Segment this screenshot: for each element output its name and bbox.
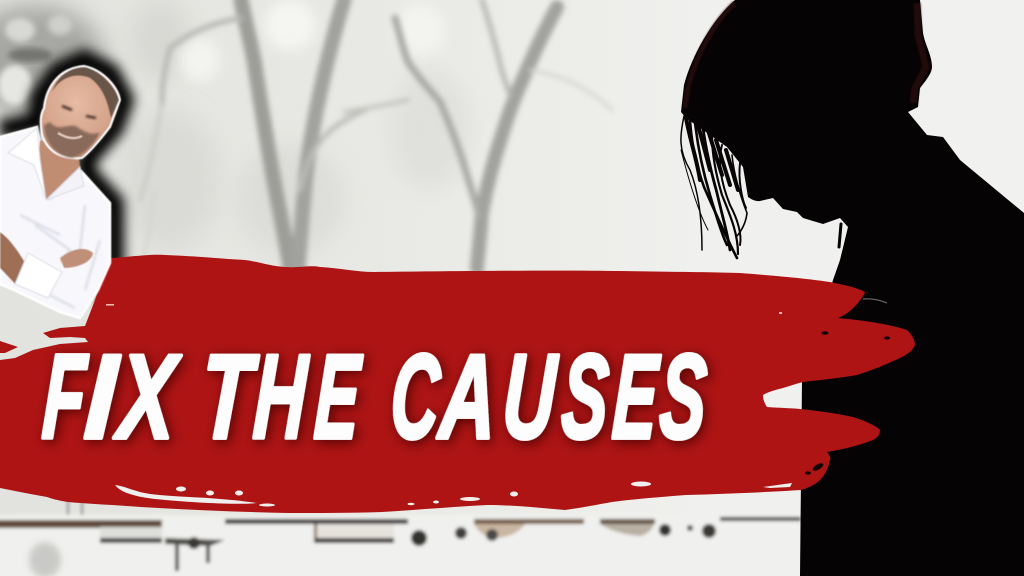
portrait dark halo (0, 60, 124, 300)
background: blurred bare trees (140, 0, 612, 270)
title: U (500, 330, 561, 464)
wet hair strands (681, 116, 747, 258)
man portrait figure (0, 66, 120, 318)
title: F (40, 330, 90, 464)
title: E (610, 330, 663, 464)
title: C (388, 330, 444, 464)
shirt cuff (15, 253, 62, 298)
dark splatter marks (805, 331, 890, 475)
hair (52, 67, 119, 118)
left-edge red diamond fleck (0, 341, 18, 353)
highlight on sleeve (863, 299, 887, 303)
head, neck and body (681, 0, 1024, 576)
silhouette of person with head bowed (681, 0, 1024, 576)
beard (44, 122, 100, 158)
beanie reddish tint (685, 3, 926, 108)
title: T (198, 330, 261, 464)
title (40, 330, 710, 464)
shirt shadow folds (20, 185, 100, 308)
title: X (112, 330, 184, 464)
head (41, 66, 120, 158)
title: S (559, 330, 612, 464)
neck (38, 140, 80, 200)
title: I (82, 330, 122, 464)
red paint brush stroke banner (0, 255, 915, 513)
crossed arms (0, 232, 35, 285)
hoodie drawstring (839, 224, 841, 247)
title: H (251, 330, 311, 464)
collar (8, 128, 46, 200)
background: snow-covered fence (0, 495, 802, 576)
eyes and mouth (62, 106, 96, 118)
title: A (435, 330, 500, 464)
title: E (312, 330, 365, 464)
shirt with white outline (0, 127, 110, 318)
paint gaps (106, 304, 792, 506)
title: S (657, 330, 710, 464)
